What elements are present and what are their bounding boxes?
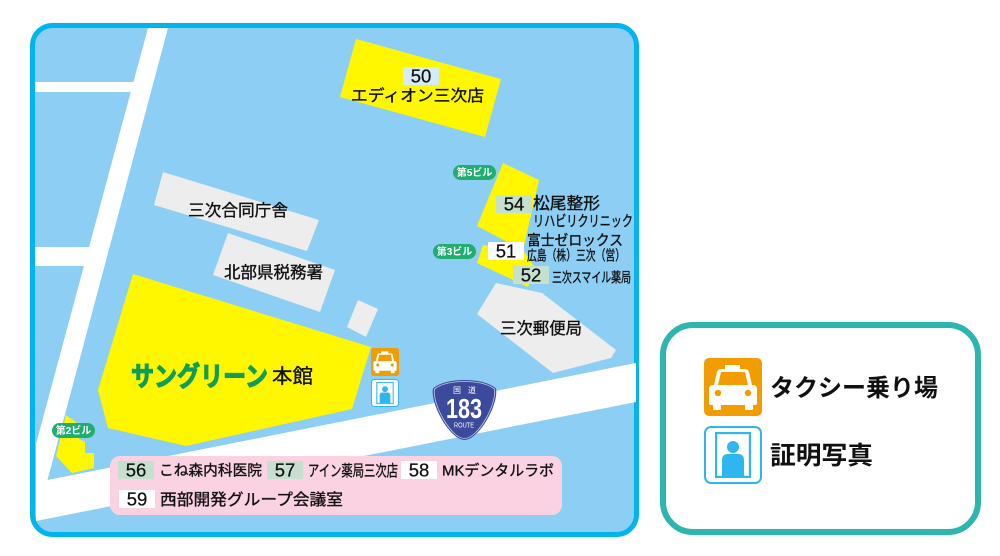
label: 三次郵便局: 三次郵便局 [500, 319, 582, 338]
building: 第3ビル [477, 245, 535, 287]
label: 三次スマイル薬局: 三次スマイル薬局 [552, 270, 631, 286]
tenant 59: 西部開発グループ会議室 [160, 491, 343, 509]
tenant 56 [118, 460, 262, 480]
building: 三次郵便局 [477, 283, 616, 373]
pill: 第2ビル [52, 423, 95, 438]
panel: map [32, 26, 636, 534]
label: 50 [403, 66, 439, 86]
icon: route 183 shield: 国 道 [453, 385, 476, 395]
roads [35, 28, 636, 521]
label: リハビリクリニック: リハビリクリニック [533, 213, 633, 230]
pill: 第3ビル: 第3ビル [437, 245, 472, 258]
tenant 59 [119, 488, 343, 510]
icon: taxi [704, 358, 762, 416]
icon: route 183 shield [433, 380, 496, 440]
label: サングリーン本館: 本館 [272, 365, 313, 388]
tenant 58: 58 [409, 460, 429, 480]
label: 50: 50 [411, 66, 431, 86]
building: sun green main [98, 274, 371, 446]
label: 51 [488, 240, 524, 262]
building: edion [340, 39, 501, 137]
tenant 58: MKデンタルラボ [442, 462, 554, 480]
label: 三次合同庁舎: 三次合同庁舎 [188, 201, 288, 220]
label: サングリーン本館: サングリーン [131, 361, 268, 392]
pill: 第2ビル: 第2ビル [56, 424, 91, 437]
label: 北部県税務署: 北部県税務署 [224, 263, 323, 282]
label: 54 [496, 194, 532, 214]
label: 51: 51 [496, 240, 516, 262]
label: 松尾整形: 松尾整形 [533, 194, 600, 213]
icon: photo booth [705, 427, 761, 483]
icon: route 183 shield: ROUTE [454, 420, 474, 430]
label: 広島(株)三次(営): 広島（株）三次（営） [527, 248, 625, 264]
pill: 第3ビル [433, 244, 476, 259]
building: 三次合同庁舎 [154, 172, 319, 251]
panel: legend [663, 325, 978, 532]
label: エディオン三次店: エディオン三次店 [351, 86, 484, 105]
pill: 第5ビル: 第5ビル [457, 166, 492, 179]
label: 54: 54 [504, 194, 524, 214]
building: 北部県税務署 [213, 233, 335, 312]
tenant 59: 59 [127, 488, 147, 510]
label: 52 [513, 264, 549, 286]
tenant 57: 57 [275, 460, 295, 480]
label: 52: 52 [521, 264, 541, 286]
panel: tenant list [110, 456, 562, 515]
legend text: taxi stand: タクシー乗り場 [770, 375, 938, 402]
building: small annex [347, 300, 378, 337]
label: 富士ゼロックス: 富士ゼロックス [527, 232, 623, 250]
building: 第2ビル [56, 415, 94, 473]
tenant 56: こね森内科医院 [159, 462, 262, 480]
icon: taxi small [371, 348, 399, 376]
pill: 第5ビル [453, 165, 496, 180]
tenant 56: 56 [126, 460, 146, 480]
tenant 57 [267, 460, 398, 480]
icon: route 183 shield: 183 [446, 393, 482, 424]
tenant 58 [401, 460, 554, 480]
tenant 57: アイン薬局三次店 [308, 462, 398, 480]
building: 第5ビル [477, 163, 539, 250]
icon: photo booth small [371, 379, 399, 407]
legend text: ID photo: 証明写真 [770, 442, 873, 470]
